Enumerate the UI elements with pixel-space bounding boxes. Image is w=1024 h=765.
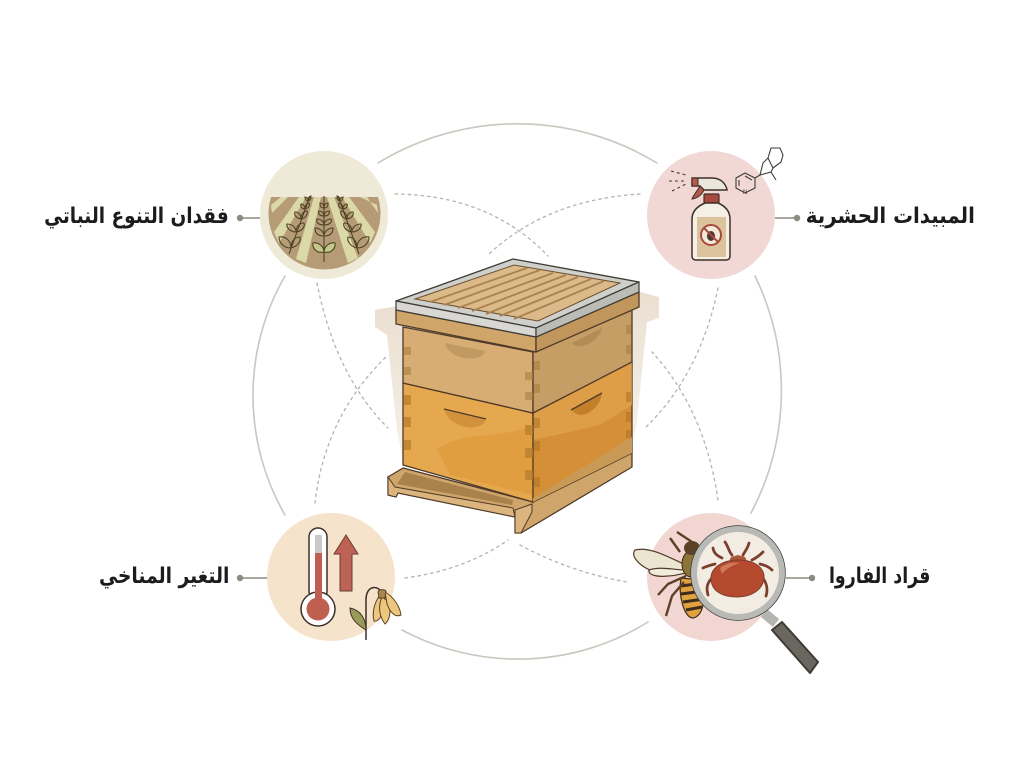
- dotted inner arcs: [315, 194, 718, 582]
- central beehive: [375, 259, 659, 533]
- lid band: [396, 310, 536, 352]
- hive base: [388, 453, 632, 533]
- dovetails: [404, 325, 631, 400]
- lower box right: [533, 362, 632, 502]
- top bars: [415, 265, 620, 321]
- molecule diagram: N: [743, 190, 747, 196]
- magnifier handle: [764, 613, 776, 623]
- connector lines to labels: [237, 215, 815, 581]
- lower box left: [403, 383, 533, 502]
- icon: plant diversity field: [260, 151, 388, 279]
- wilted flower: [373, 590, 401, 624]
- mite: [703, 542, 772, 596]
- label: climate change: التغير المناخي: [99, 564, 229, 589]
- label: varroa mites: قراد الفاروا: [829, 564, 930, 589]
- icon: climate change: [267, 513, 401, 641]
- metal frame: [396, 259, 639, 328]
- label: pesticides: المبيدات الحشرية: [806, 204, 975, 229]
- upper box right: [533, 310, 632, 413]
- bee: [634, 532, 704, 618]
- label: plant diversity loss: فقدان التنوع النباتي: [44, 204, 229, 229]
- icon: varroa mite and bee under magnifier: [634, 513, 818, 673]
- icon: pesticide spray bottle: [647, 148, 783, 279]
- outer ring arcs: [253, 124, 781, 659]
- upper box left: [403, 327, 533, 413]
- ghost box behind hive: [375, 305, 405, 470]
- hand holds: [445, 343, 485, 358]
